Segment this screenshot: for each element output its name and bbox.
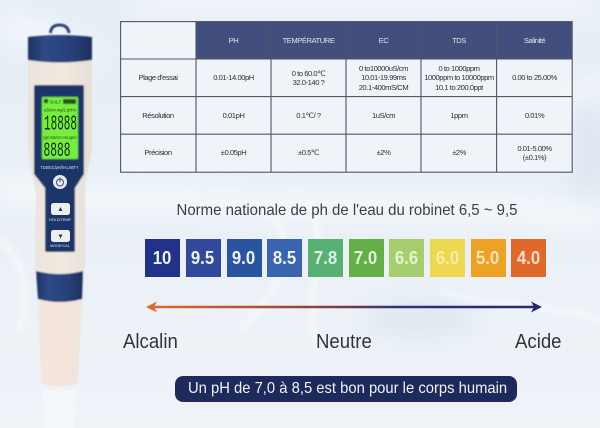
swatch 5.0 [470,239,506,277]
cell: salinity precision: (±0.1%) [523,153,546,162]
cell: EC resolution: 1uS/cm [372,111,395,120]
cell: temperature precision: ±0.5℃ [298,148,319,157]
icon: hold button [51,203,70,215]
header: Salinité: Salinité [524,36,545,45]
swatch 4.0: 4.0 [517,248,540,268]
swatch 9.5 [186,239,220,277]
cell: EC precision: ±2% [377,148,390,157]
row label: Précision: Précision [144,148,172,157]
cell: EC range [359,64,408,92]
cell: TDS range: 0 to 1000ppm [438,64,480,73]
callout: healthy pH [175,376,517,402]
text: mode button label: MODE/CAL [50,244,70,248]
swatch 7.8: 7.8 [314,248,337,268]
cell: TDS range: 10.1 to 200.0ppt [435,83,483,92]
swatch 10: 10 [153,248,172,268]
swatch 5.0: 5.0 [476,248,500,268]
swatch 9.0 [226,239,262,277]
swatch 7.8 [308,239,343,277]
cell: temperature resolution: 0.1℃/ ? [296,111,321,120]
swatch 6.0 [430,239,465,277]
cell: EC range: 20.1-400mS/CM [359,83,408,92]
table header band [196,22,572,59]
spec table [120,21,573,173]
table grid [120,21,573,173]
text: lcd reading top: 18888 [44,114,77,136]
heading: tap water pH norm: Norme nationale de ph de l'eau du robinet 6,5 ~ 9,5 [177,202,517,219]
text: mode label: TDS/EC/pH/SALINITY [40,165,79,170]
cell: temperature range: 0 to 60.0℃ [292,69,325,78]
cell: EC range: 0 to10000uS/cm [359,64,408,73]
cell: pH range: 0.01-14.00pH [213,73,254,82]
pH scale swatches [145,239,546,277]
header: TDS: TDS [452,36,466,45]
label: Alcalin: Alcalin [123,331,178,353]
cell: TDS range [424,64,494,92]
row label: Résolution: Résolution [142,111,174,120]
swatch 8.5: 8.5 [273,248,296,268]
header: PH: PH [229,36,238,45]
swatch 6.6: 6.6 [395,248,418,268]
text: lcd units row 2: ppt mS/cm mV ppm [44,135,77,140]
cell: pH resolution: 0.01pH [223,111,244,120]
cell: TDS range: 1000ppm to 10000ppm [424,73,494,82]
swatch 6.0: 6.0 [436,248,459,268]
icon: mode button [51,230,70,242]
swatch 6.6 [389,239,424,277]
text: lcd units row 1: uS/cm mg/L pH% [44,108,76,112]
cell: salinity range: 0.00 to 25.00% [512,73,557,82]
cell: salinity resolution: 0.01% [525,111,544,120]
icon: power button [53,175,67,189]
swatch 9.0: 9.0 [232,248,256,268]
swatch 7.0 [348,239,384,277]
text: lcd reading bottom: 8888 [44,140,70,163]
label: Acide: Acide [515,331,562,353]
header: Température: TEMPÉRATURE [283,36,334,45]
cell: TDS precision: ±2% [452,148,466,157]
callout: healthy pH: Un pH de 7,0 à 8,5 est bon pour le corps humain [188,380,507,397]
text: hold label: HOLD/TEMP [49,218,72,222]
cell: TDS resolution: 1ppm [450,111,468,120]
cell: temperature range: 32.0-140 ? [293,78,324,87]
cell: pH precision: ±0.05pH [221,148,246,157]
icon: pH meter pen [26,22,94,387]
swatch 10 [145,239,180,277]
text: lcd labels: SALT [50,100,61,104]
cell: salinity precision [517,144,552,162]
header: EC: EC [379,36,388,45]
pen reflection [42,390,76,428]
swatch 8.5 [267,239,302,277]
table background [120,21,573,173]
cell: salinity precision: 0.01-5.00% [517,144,552,153]
cell: EC range: 10.01-19.99ms [361,73,406,82]
swatch 4.0 [511,239,546,277]
label: Neutre: Neutre [316,331,372,353]
swatch 9.5: 9.5 [191,248,215,268]
swatch 7.0: 7.0 [354,248,378,268]
arrow: alkaline to acid scale [146,302,542,312]
row label: Plage d'essai: Plage d'essai [138,73,178,82]
cell: temperature range [292,69,326,87]
